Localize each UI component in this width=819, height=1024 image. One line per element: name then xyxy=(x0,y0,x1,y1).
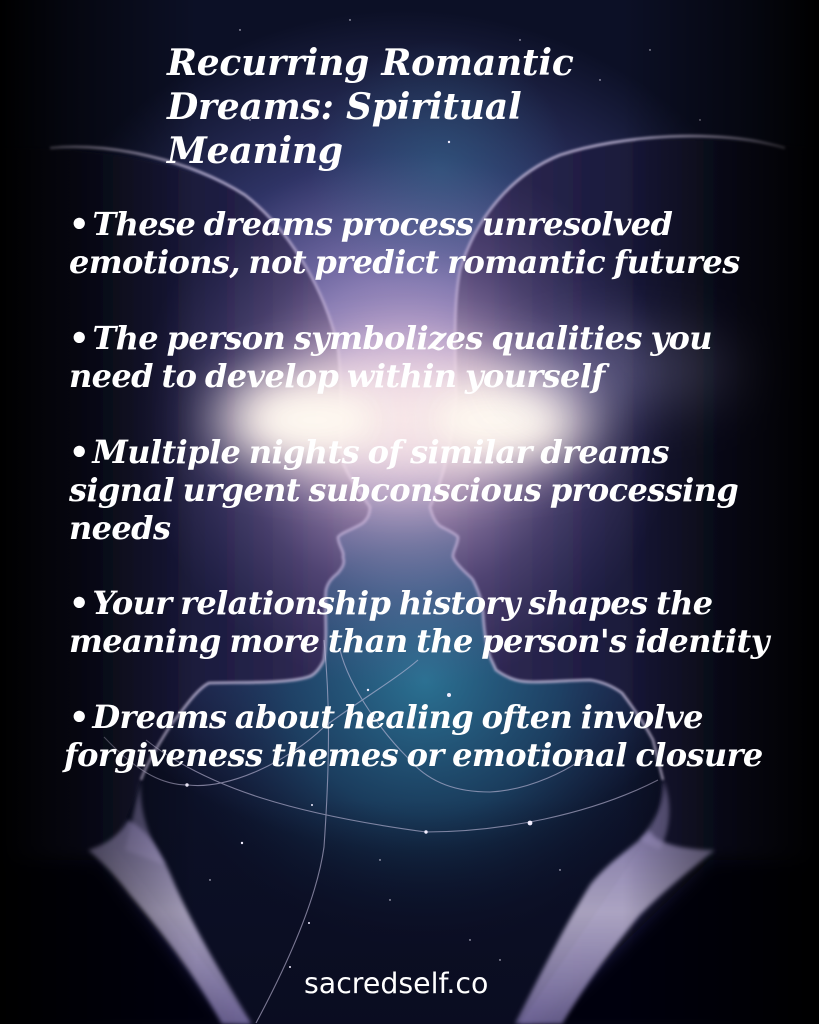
left arm plume xyxy=(88,820,252,1024)
right head silhouette xyxy=(430,136,819,1024)
constellation threads xyxy=(104,640,658,1023)
bullet 3: needs xyxy=(69,509,170,547)
bullet 4: • Your relationship history shapes the xyxy=(69,584,713,622)
bullet 2: need to develop within yourself xyxy=(69,357,605,395)
left head rim light xyxy=(50,147,370,780)
bullet 5: • Dreams about healing often involve xyxy=(69,698,703,736)
dark lower body shadows xyxy=(0,860,819,1024)
right head rim light xyxy=(430,136,785,780)
title: Dreams: Spiritual xyxy=(167,86,522,128)
bullet 2 xyxy=(69,319,712,395)
title: Recurring Romantic xyxy=(167,42,574,84)
title: Meaning xyxy=(167,130,343,172)
bullet 5 xyxy=(62,698,763,774)
bullet 3: signal urgent subconscious processing xyxy=(69,471,738,509)
bullet 5: forgiveness themes or emotional closure xyxy=(64,736,763,774)
bullet 3: • Multiple nights of similar dreams xyxy=(69,433,669,471)
left head silhouette xyxy=(0,147,370,1024)
left arm glow xyxy=(125,780,165,865)
central light glow xyxy=(0,0,819,800)
right arm glow xyxy=(640,780,669,850)
title xyxy=(166,42,574,172)
bullet 4 xyxy=(69,584,772,660)
bullet 4: meaning more than the person's identity xyxy=(69,622,769,660)
footer website: sacredself.co xyxy=(304,967,488,1000)
bullet 2: • The person symbolizes qualities you xyxy=(69,319,712,357)
bullet 1 xyxy=(69,205,740,281)
bullet 1: • These dreams process unresolved xyxy=(69,205,672,243)
stars xyxy=(185,19,701,968)
bullet 1: emotions, not predict romantic futures xyxy=(69,243,740,281)
right arm plume xyxy=(515,830,715,1024)
bullet 3 xyxy=(69,433,738,547)
